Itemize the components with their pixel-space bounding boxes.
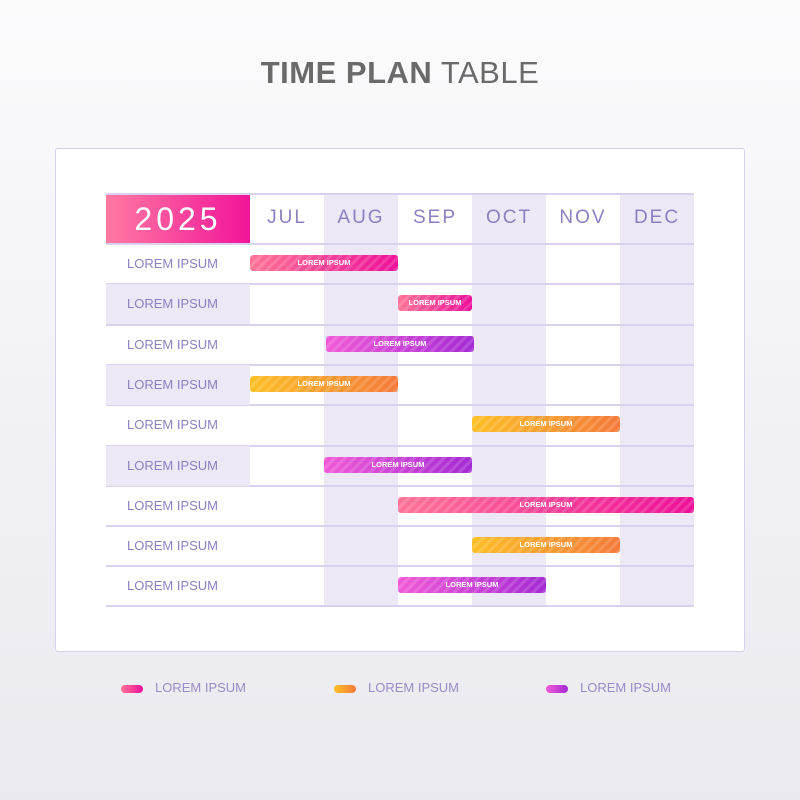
header year: 2025 bbox=[134, 201, 222, 237]
header year bbox=[106, 193, 250, 243]
bars: LOREM IPSUM bbox=[298, 379, 350, 388]
header months bbox=[267, 207, 680, 228]
column: AUG background bbox=[324, 193, 398, 606]
bars bbox=[250, 255, 694, 593]
row labels: LOREM IPSUM bbox=[127, 538, 218, 553]
header months: DEC bbox=[634, 207, 680, 228]
row labels: LOREM IPSUM bbox=[127, 296, 218, 311]
column: DEC background bbox=[620, 193, 694, 606]
bars: LOREM IPSUM bbox=[372, 460, 424, 469]
panel: table frame bbox=[55, 148, 745, 652]
header months: NOV bbox=[559, 207, 607, 228]
legend: pink: LOREM IPSUM bbox=[155, 680, 246, 695]
bars: LOREM IPSUM bbox=[520, 500, 572, 509]
row labels: LOREM IPSUM bbox=[127, 578, 218, 593]
bars: LOREM IPSUM bbox=[298, 258, 350, 267]
bars: LOREM IPSUM bbox=[446, 580, 498, 589]
legend: orange: LOREM IPSUM bbox=[368, 680, 459, 695]
header months: JUL bbox=[267, 207, 307, 228]
column: OCT background bbox=[472, 193, 546, 606]
header months: AUG bbox=[337, 207, 385, 228]
bars: LOREM IPSUM bbox=[520, 540, 572, 549]
row labels: LOREM IPSUM bbox=[127, 377, 218, 392]
row labels: LOREM IPSUM bbox=[127, 498, 218, 513]
row labels: LOREM IPSUM bbox=[127, 256, 218, 271]
row labels: LOREM IPSUM bbox=[127, 417, 218, 432]
bars: LOREM IPSUM bbox=[520, 419, 572, 428]
title: TIME PLAN TABLE bbox=[261, 55, 539, 90]
legend: purple: LOREM IPSUM bbox=[580, 680, 671, 695]
header months: OCT bbox=[486, 207, 532, 228]
row labels bbox=[106, 256, 250, 593]
bars: LOREM IPSUM bbox=[374, 339, 426, 348]
row labels: LOREM IPSUM bbox=[127, 458, 218, 473]
bars: LOREM IPSUM bbox=[409, 298, 461, 307]
row labels: LOREM IPSUM bbox=[127, 337, 218, 352]
header months: SEP bbox=[413, 207, 457, 228]
